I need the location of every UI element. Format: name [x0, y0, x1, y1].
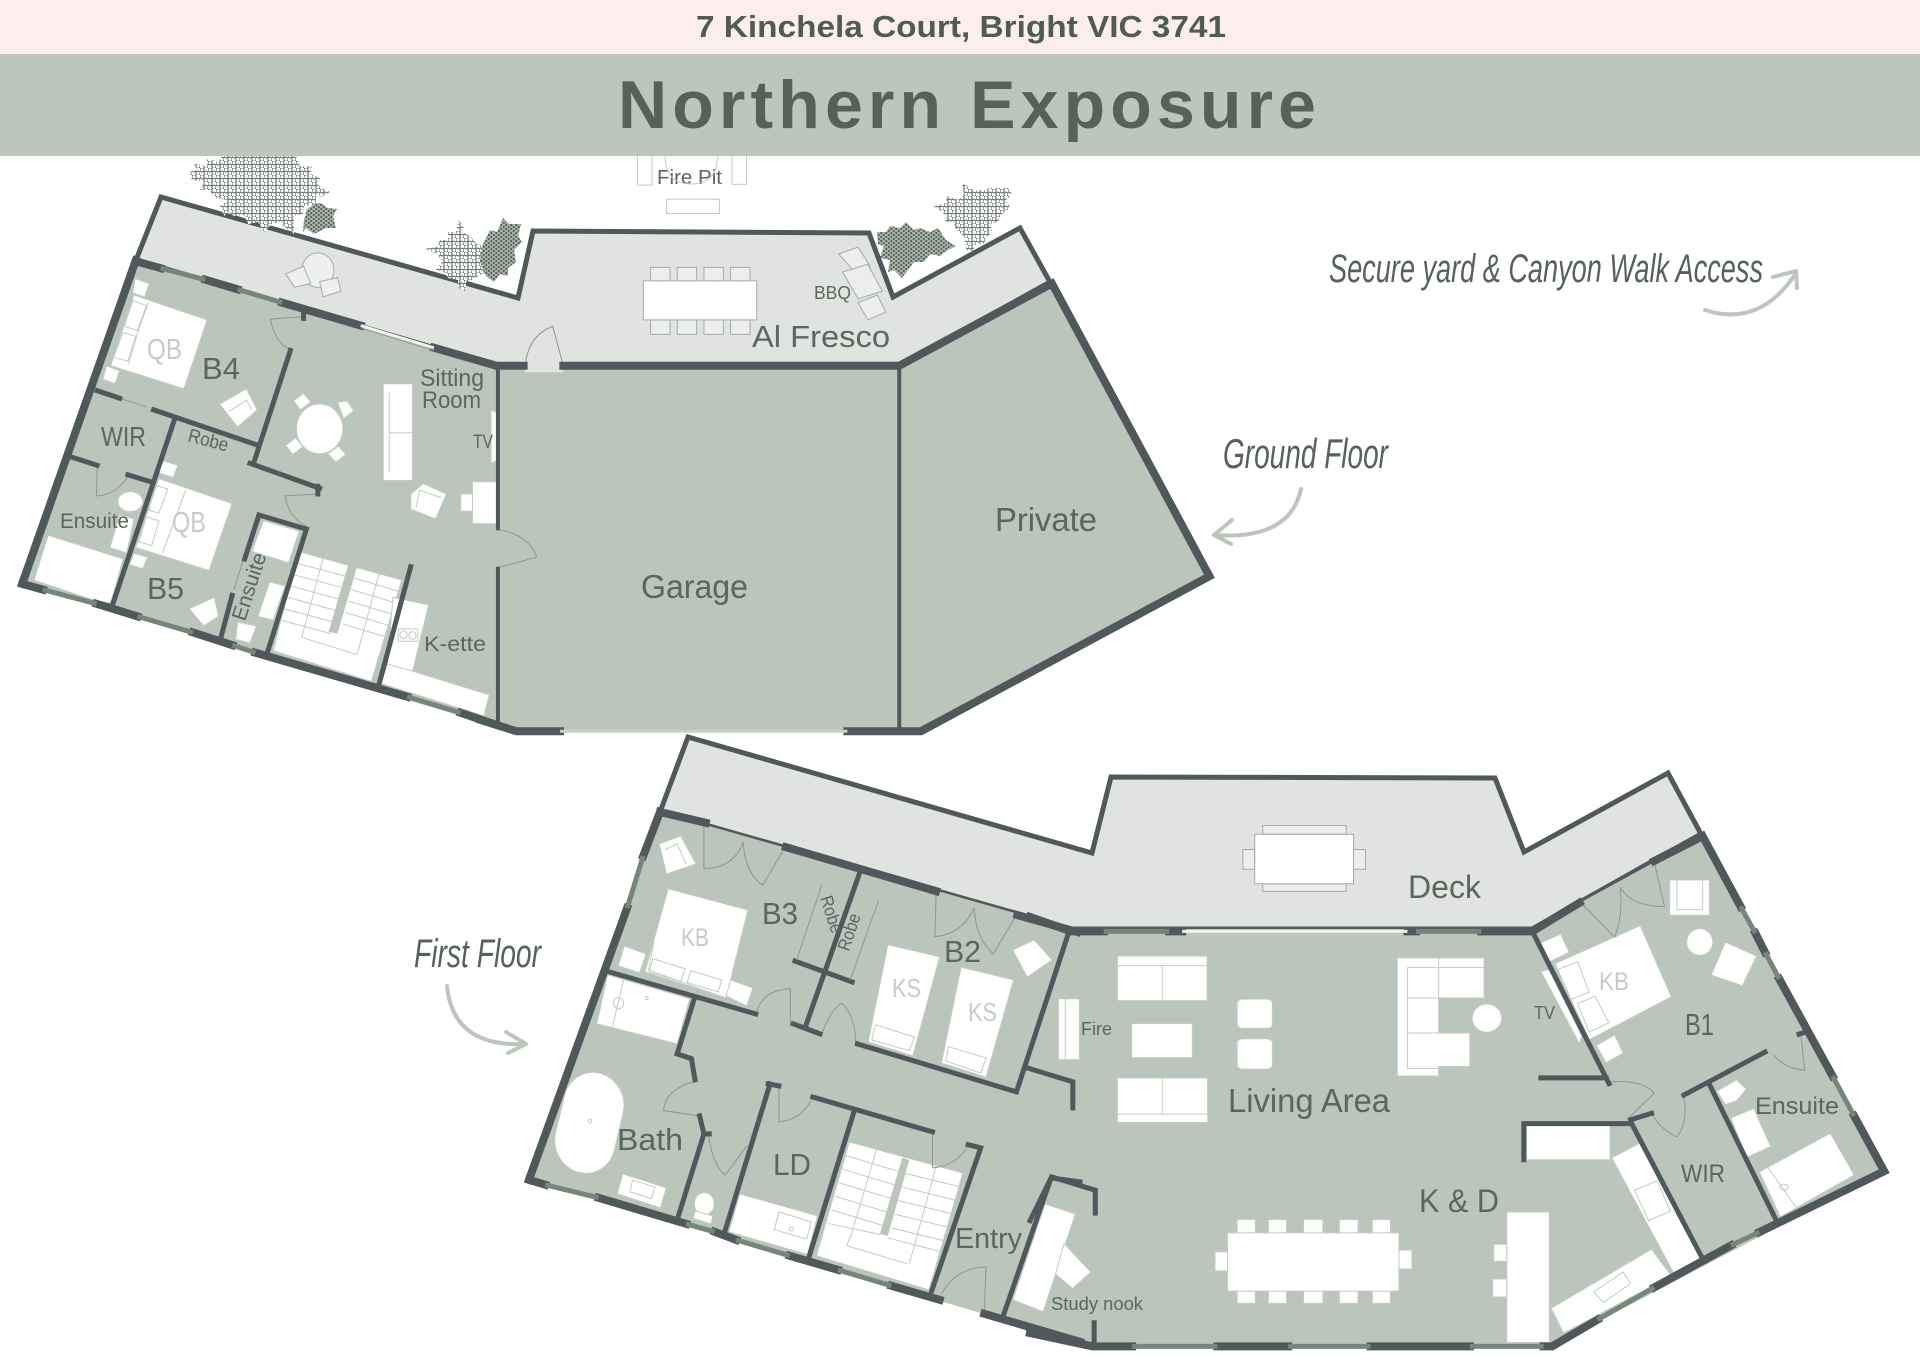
label: B5: B5: [147, 571, 184, 606]
first furniture right wing: [1056, 825, 1854, 1343]
deck: [660, 737, 1701, 929]
tree cluster right: [877, 184, 1012, 278]
title band: Northern Exposure: [618, 67, 1316, 143]
label: TV: TV: [1534, 1003, 1555, 1023]
label: Study nook: Study nook: [1051, 1294, 1144, 1314]
label: Entry: Entry: [955, 1223, 1022, 1255]
label: Fire: Fire: [1081, 1019, 1112, 1039]
label: WIR: WIR: [1681, 1160, 1725, 1188]
garden plants and fire pit: [189, 151, 1012, 291]
first walls right wing: [1030, 836, 1884, 1346]
label: KB in B1: KB: [1599, 968, 1629, 996]
arrow: secure yard: [1705, 271, 1797, 314]
label: Private: Private: [995, 501, 1097, 538]
label: KB in B3: KB: [681, 924, 709, 952]
label: KS right: KS: [968, 997, 997, 1027]
label: Fire Pit: Fire Pit: [657, 167, 722, 189]
label: K-ette: K-ette: [424, 633, 486, 656]
label: B4: B4: [202, 351, 240, 386]
label: TV: TV: [473, 432, 493, 453]
ground walls left wing: [22, 261, 498, 725]
label: QB in B4: QB: [147, 334, 182, 366]
kitchenette counters: [380, 597, 489, 716]
yard: [136, 197, 1050, 366]
label: K & D: K & D: [1419, 1183, 1499, 1219]
fire pit furniture: [638, 151, 747, 213]
label: B3: B3: [762, 896, 798, 931]
address band: 7 Kinchela Court, Bright VIC 3741: [696, 9, 1226, 44]
label: Deck: Deck: [1408, 869, 1482, 905]
ground furniture al fresco: [498, 247, 886, 568]
label: Robe B3: Robe: [816, 893, 847, 935]
label: LD: LD: [773, 1147, 811, 1182]
first furniture left wing: [548, 836, 1075, 1312]
tree cluster middle: [425, 218, 522, 291]
first floor plan: [529, 737, 1884, 1346]
label: QB in B5: QB: [172, 507, 206, 539]
label: Robe B2: Robe: [834, 911, 865, 953]
label: BBQ: BBQ: [814, 283, 851, 303]
arrow: ground floor: [1214, 489, 1301, 544]
ground floor plan: [22, 167, 1209, 731]
label: WIR: WIR: [101, 421, 146, 452]
callout: ground floor: Ground Floor: [1223, 430, 1389, 477]
ground stairs: [273, 551, 402, 681]
label: Ensuite vertical: Ensuite: [228, 550, 271, 624]
label: Garage: Garage: [641, 568, 748, 605]
label: Sitting Room: Sitting: [420, 365, 484, 392]
label: Ensuite: Ensuite: [1755, 1093, 1839, 1120]
label: Al Fresco: Al Fresco: [752, 319, 890, 354]
label: B2: B2: [944, 934, 981, 969]
label: Sitting Room: Room: [422, 387, 481, 414]
title band: [0, 54, 1920, 156]
callout: first floor: First Floor: [414, 932, 542, 976]
label: Bath: Bath: [617, 1122, 683, 1157]
label: Robe: Robe: [186, 426, 231, 456]
label: KS left: KS: [892, 973, 921, 1003]
label: B1: B1: [1685, 1007, 1714, 1042]
first floor slab: [529, 812, 1884, 1346]
first walls left wing: [529, 812, 1080, 1342]
label: Ensuite: Ensuite: [60, 510, 129, 533]
first floor stairs: [816, 1142, 963, 1290]
arrow: first floor: [447, 986, 526, 1053]
ground furniture left wing: [34, 253, 496, 716]
ground floor slab: [22, 260, 1209, 731]
address band: [0, 0, 1920, 54]
tree cluster left: [189, 156, 337, 234]
ground walls garage and private: [480, 283, 1209, 731]
label: Sitting Room: [420, 365, 484, 414]
label: Living Area: Living Area: [1228, 1082, 1391, 1119]
